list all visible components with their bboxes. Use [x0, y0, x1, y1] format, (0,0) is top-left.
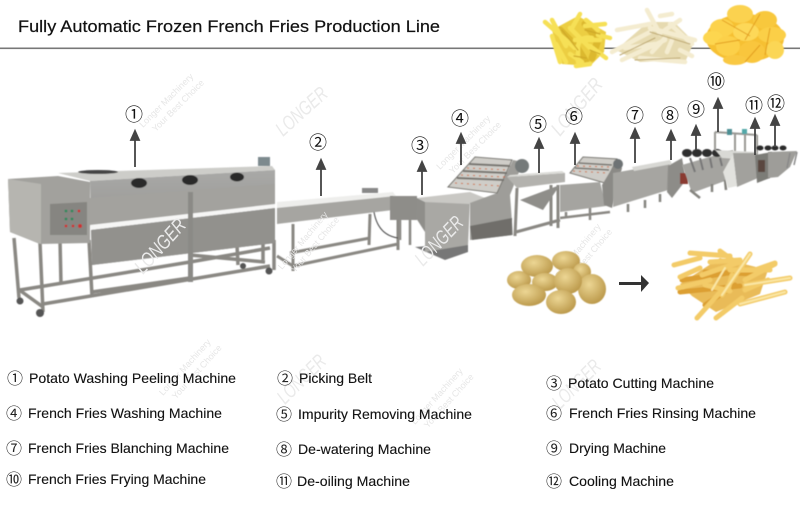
legend item 6: [546, 400, 756, 424]
legend item 9: ⑨: [546, 435, 562, 459]
arrow: potatoes to fries: [619, 275, 649, 292]
number 3: ③: [411, 132, 429, 158]
machine 9: drying machine: [682, 149, 733, 198]
callout arrows: [131, 99, 779, 196]
legend item 1: [7, 365, 236, 389]
arrow 10: [714, 99, 722, 132]
arrow 5: [535, 139, 543, 173]
legend item 12: [546, 468, 674, 492]
legend item 3: Potato Cutting Machine: [568, 375, 714, 391]
legend item 8: De-watering Machine: [298, 441, 431, 457]
number 4: ④: [451, 105, 469, 131]
number 12: ⑫: [767, 90, 785, 116]
watermark 1: Your Best Choice: [150, 78, 206, 134]
watermark 8: Longer Machinery: [549, 221, 603, 283]
number 9: ⑨: [687, 96, 705, 122]
legend item 5: ⑤: [276, 401, 292, 425]
machine 11: de-oiling machine: [755, 152, 772, 183]
arrow 8: [667, 131, 675, 160]
watermark 7: LONGER: [411, 212, 468, 270]
legend item 12: Cooling Machine: [569, 473, 674, 489]
legend item 2: Picking Belt: [299, 370, 372, 386]
machine 2: picking belt: [277, 188, 398, 271]
legend item 12: ⑫: [546, 468, 562, 492]
watermark 2: LONGER: [272, 83, 332, 141]
legend item 1: ①: [7, 365, 23, 389]
food image: whole potatoes: [507, 251, 606, 314]
watermark 6: LONGER: [547, 74, 608, 140]
legend: machine list: [6, 365, 756, 492]
machine 6: french fries rinsing machine: [560, 157, 623, 220]
number 5: ⑤: [529, 111, 547, 137]
machine 8: de-watering machine: [667, 158, 688, 198]
legend item 1: Potato Washing Peeling Machine: [29, 370, 236, 386]
arrow 2: [317, 160, 325, 196]
watermark 4: Your Best Choice: [289, 215, 341, 274]
number 10: ⑩: [707, 68, 725, 94]
machine 10: french fries frying machine: [715, 129, 758, 188]
machine 1 viewing windows: [131, 172, 244, 188]
machine 1: potato washing peeling machine: [8, 157, 275, 317]
machine 3: potato cutting machine: [390, 192, 490, 260]
legend item 4: ④: [6, 400, 22, 424]
watermark 12: LONGER: [548, 356, 606, 414]
legend item 6: French Fries Rinsing Machine: [569, 405, 756, 421]
number 6: ⑥: [565, 103, 583, 129]
legend item 4: [6, 400, 222, 424]
arrow 6: [571, 134, 579, 165]
legend item 10: [6, 466, 206, 490]
machine 1 casters: [16, 263, 272, 317]
machine 1 legs and frame: [14, 238, 274, 312]
legend item 11: ⑪: [276, 468, 292, 492]
legend item 11: De-oiling Machine: [297, 473, 410, 489]
heading: title: Fully Automatic Frozen French Fries Production Line: [18, 17, 440, 36]
watermark 5: Your Best Choice: [447, 120, 503, 176]
machine 4: french fries washing machine: [448, 157, 529, 240]
arrow 9: [692, 126, 700, 150]
legend item 6: ⑥: [546, 400, 562, 424]
legend item 9: Drying Machine: [569, 440, 666, 456]
machine 1 control box housing: [8, 176, 90, 244]
food image: raw potato strips: [612, 10, 695, 62]
legend item 3: [546, 370, 714, 394]
legend item 8: [276, 436, 431, 460]
arrow 1: [131, 131, 139, 167]
food image: crinkle cut fries: [545, 14, 610, 66]
number 7: ⑦: [626, 102, 644, 128]
legend item 2: [277, 365, 372, 389]
legend item 2: ②: [277, 365, 293, 389]
watermark 10: Your Best Choice: [422, 372, 476, 430]
number 2: ②: [309, 129, 327, 155]
number 8: ⑧: [661, 102, 679, 128]
callout numbers: [125, 68, 785, 158]
legend item 8: ⑧: [276, 436, 292, 460]
legend item 10: French Fries Frying Machine: [28, 471, 206, 487]
watermark 11: LONGER: [273, 351, 331, 409]
watermark 10: Longer Machinery: [409, 366, 465, 426]
legend item 7: French Fries Blanching Machine: [28, 440, 229, 456]
watermark 3: LONGER: [130, 215, 191, 278]
legend item 4: French Fries Washing Machine: [28, 405, 222, 421]
header rule: [0, 48, 800, 49]
watermark 1: Longer Machinery: [137, 71, 196, 129]
number 1: ①: [125, 101, 143, 127]
legend item 5: [276, 401, 472, 425]
watermark 9: Your Best Choice: [170, 343, 224, 401]
legend item 5: Impurity Removing Machine: [298, 406, 472, 422]
machine 5: impurity removing machine: [507, 171, 565, 236]
legend item 11: [276, 468, 410, 492]
legend item 3: ③: [546, 370, 562, 394]
arrow 4: [457, 134, 465, 165]
watermark 5: Longer Machinery: [434, 113, 493, 171]
watermark 9: Longer Machinery: [157, 337, 213, 397]
number 11: ⑪: [745, 92, 763, 118]
legend item 9: [546, 435, 666, 459]
food image: french fries: [674, 251, 790, 318]
arrow 3: [418, 162, 426, 195]
machine 1 top motor: [258, 157, 270, 166]
machine 1 drum body: [90, 170, 275, 265]
food image: potato chips: [703, 5, 786, 65]
machine 12: cooling machine: [756, 146, 797, 178]
machine 1 top opening: [78, 170, 118, 174]
watermark 8: Your Best Choice: [562, 227, 614, 286]
machine 1 control panel: [50, 202, 87, 235]
machine 7: french fries blanching machine: [613, 160, 672, 212]
legend item 7: ⑦: [6, 435, 22, 459]
legend item 7: [6, 435, 229, 459]
watermark 4: Longer Machinery: [276, 209, 330, 271]
arrow 11: [751, 119, 759, 155]
arrow 12: [771, 116, 779, 147]
legend item 10: ⑩: [6, 466, 22, 490]
arrow 7: [631, 129, 639, 163]
